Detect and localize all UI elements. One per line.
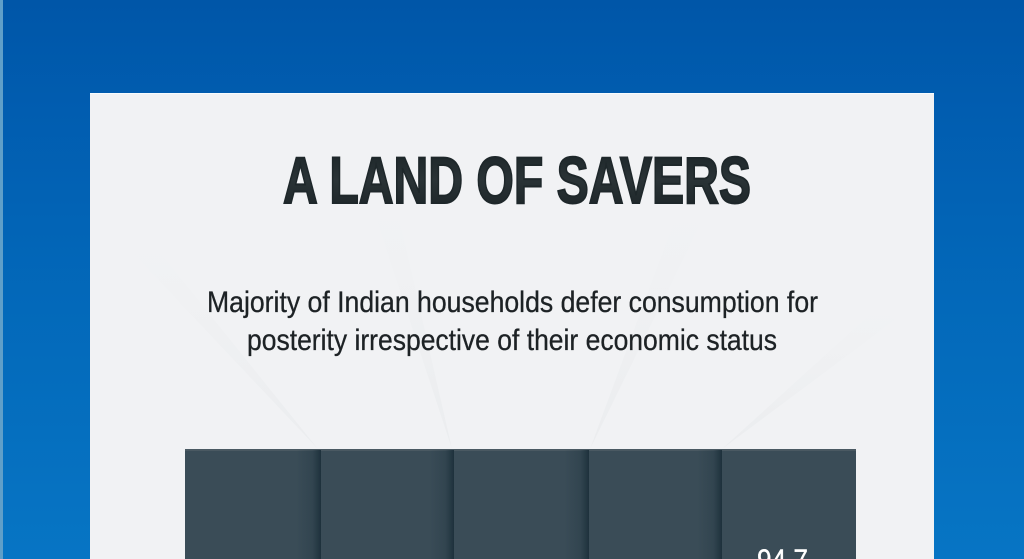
column shadows <box>296 450 722 559</box>
title: A LAND OF SAVERS <box>283 143 751 217</box>
subtitle text: posterity irrespective of their economic status <box>247 324 777 357</box>
panel: dark column chart <box>185 449 856 559</box>
subtitle text: Majority of Indian households defer consumption for <box>207 286 818 319</box>
panel: white card <box>90 93 934 559</box>
subtitle text <box>207 286 818 357</box>
